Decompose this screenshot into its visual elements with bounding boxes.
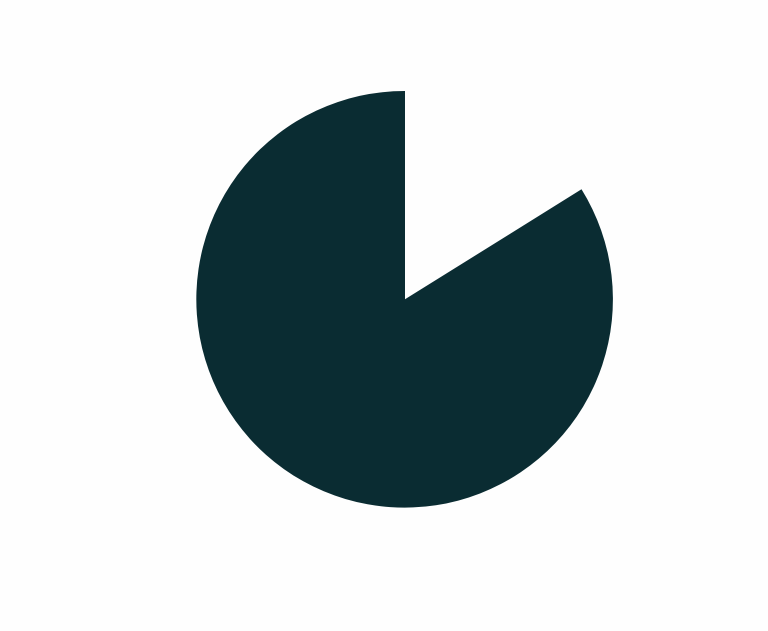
pie slice: main segment (196, 91, 613, 508)
